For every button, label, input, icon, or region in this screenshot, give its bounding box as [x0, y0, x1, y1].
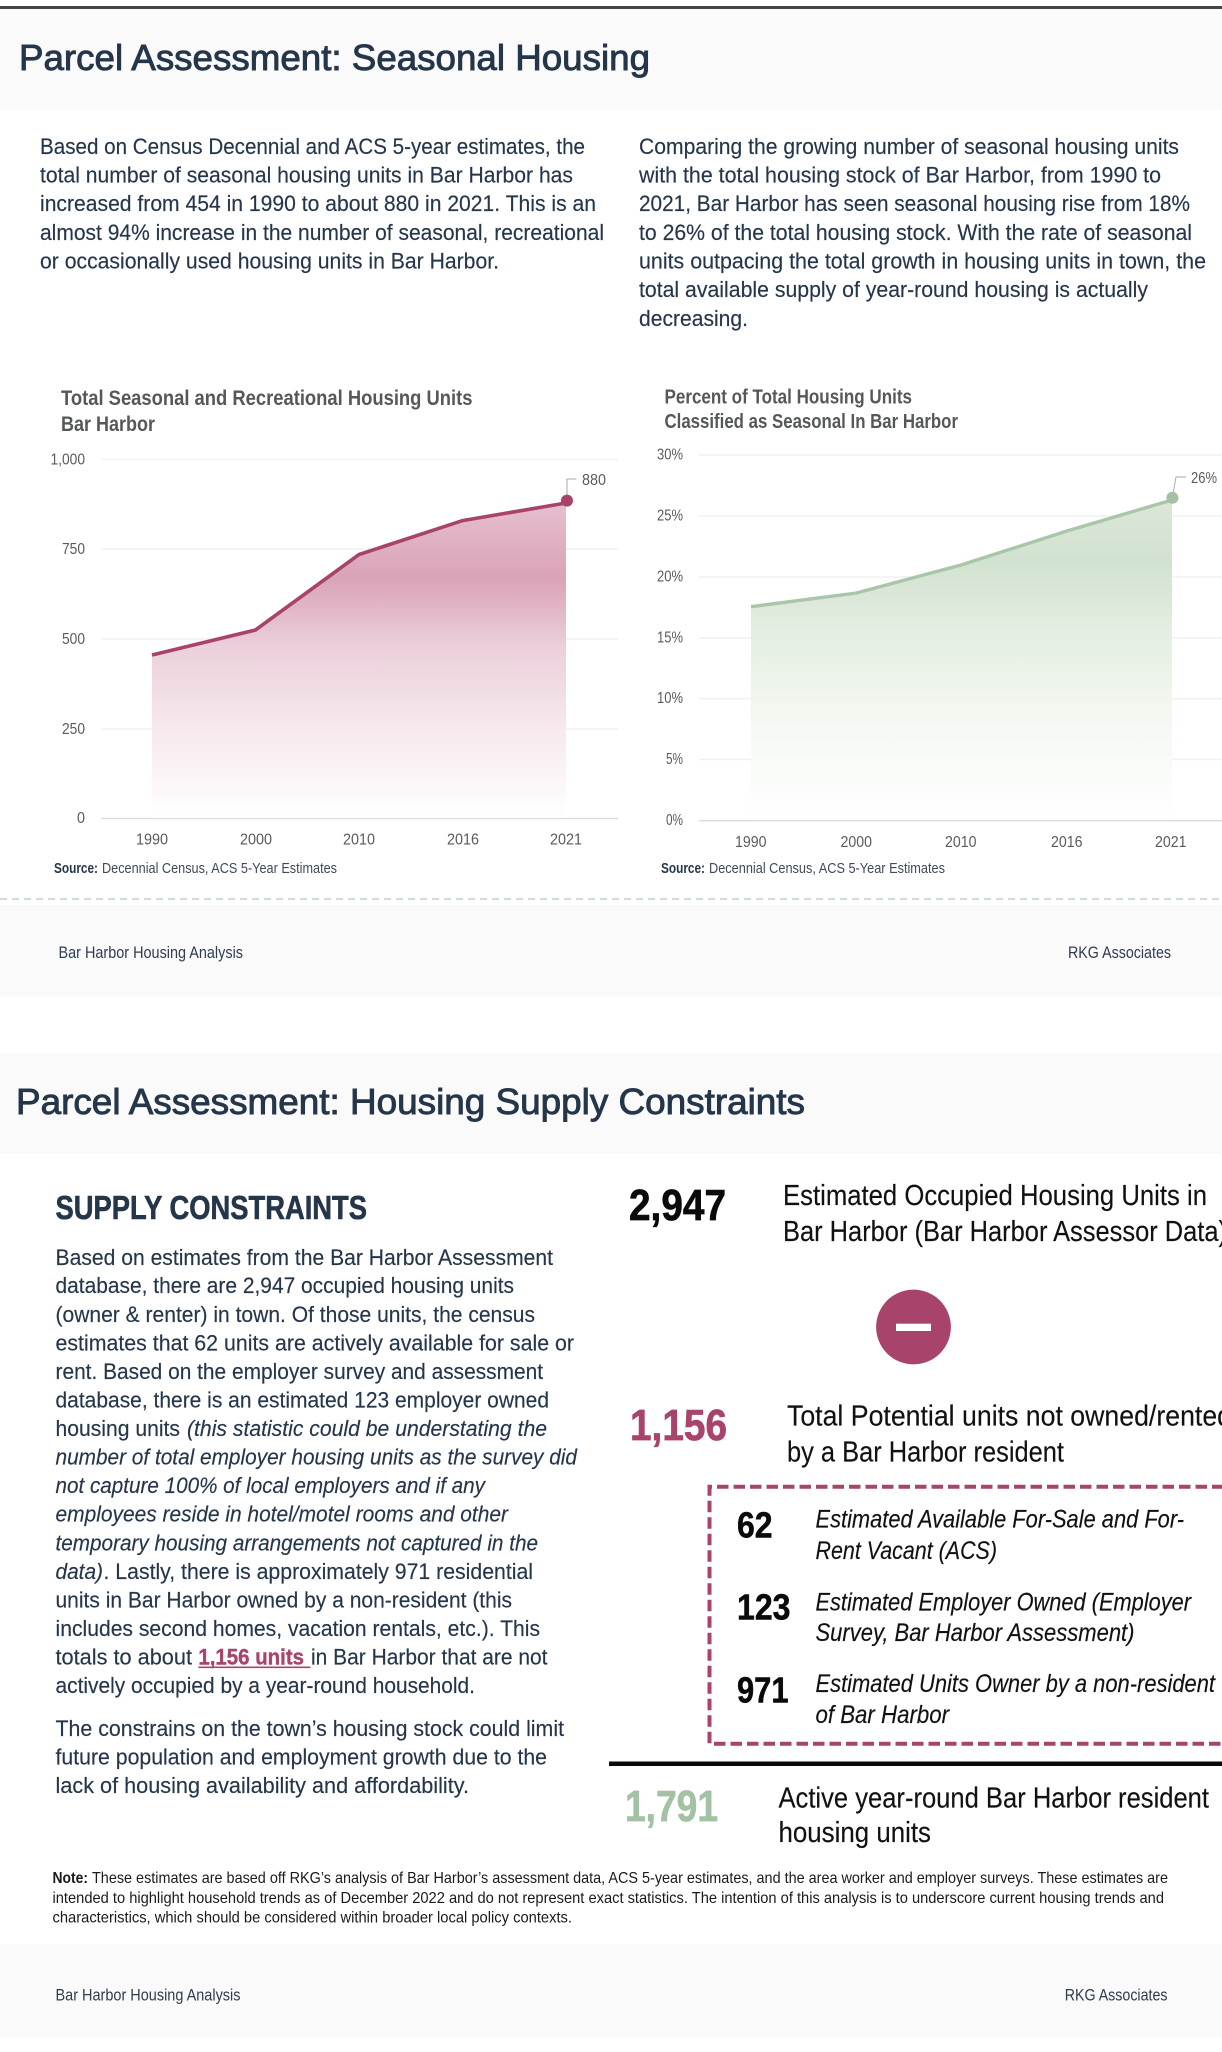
x axis labels: 2016: [447, 832, 479, 848]
paragraph 1: includes second homes, vacation rentals, etc.). This: [56, 1616, 540, 1641]
paragraph 1: rent. Based on the employer survey and assessment: [56, 1359, 543, 1384]
paragraph 1: database, there are 2,947 occupied housing units: [56, 1273, 514, 1298]
item: employer owned: Survey, Bar Harbor Assessment): [816, 1619, 1134, 1647]
y axis labels: 30%: [657, 446, 683, 464]
source note: Decennial Census, ACS 5-Year Estimates: [709, 861, 945, 877]
paragraph 1: estimates that 62 units are actively available for sale or: [56, 1330, 574, 1356]
footer: first section: Bar Harbor Housing Analysis: [58, 944, 243, 962]
stat: potential units not owned: 1,156: [630, 1401, 727, 1450]
y axis labels: 15%: [657, 630, 683, 646]
paragraph 1: database, there is an estimated 123 employer owned: [56, 1388, 549, 1412]
heading: SUPPLY CONSTRAINTS: [56, 1189, 367, 1226]
panel: supply constraints narrative: [56, 1189, 578, 1798]
x axis labels: 2021: [550, 832, 582, 848]
x axis labels: 2000: [840, 834, 872, 851]
area fill: [751, 500, 1172, 820]
top rule: [0, 6, 1222, 9]
footer: first section: [0, 905, 1222, 996]
icon: minus: [876, 1290, 951, 1364]
paragraph 1: (this statistic could be understating the: [187, 1416, 547, 1441]
total rule: [609, 1762, 1222, 1766]
footer: second section: [0, 1944, 1222, 2037]
y axis labels: 0%: [666, 812, 683, 829]
x axis labels: 2021: [1155, 834, 1187, 851]
y axis labels: 250: [62, 721, 85, 738]
text block: seasonal units left: increased from 454 in 1990 to about 880 in 2021. This is an: [40, 191, 596, 216]
paragraph 1: temporary housing arrangements not captured in the: [56, 1530, 538, 1556]
footer: second section: Bar Harbor Housing Analysis: [56, 1987, 240, 2005]
chart title: Percent of Total Housing Units: [664, 386, 912, 408]
stat: active year-round units: [625, 1782, 1209, 1849]
source note: Source:: [661, 861, 705, 877]
y axis labels: 25%: [657, 508, 683, 524]
x axis labels: 1990: [136, 832, 168, 848]
paragraph 1: housing units: [56, 1416, 180, 1441]
chart title: Classified as Seasonal In Bar Harbor: [664, 410, 958, 433]
title: seasonal housing: Parcel Assessment: Seasonal Housing: [19, 37, 650, 78]
text block: seasonal units left: Based on Census Decennial and ACS 5-year estimates, the: [40, 134, 585, 159]
chart title: [61, 386, 473, 436]
stat: potential units not owned: by a Bar Harbor resident: [787, 1436, 1064, 1468]
item: employer owned: [737, 1587, 1192, 1647]
header: housing supply constraints: [0, 1053, 1222, 1154]
paragraph 1: number of total employer housing units as the survey did: [56, 1444, 578, 1470]
item: non-resident owned: [737, 1670, 1216, 1729]
footer: first section: RKG Associates: [1068, 944, 1171, 962]
chart title: [664, 386, 958, 433]
text block: seasonal units right: units outpacing the total growth in housing units in town, the: [639, 248, 1206, 274]
text block: seasonal units right: Comparing the growing number of seasonal housing units: [639, 134, 1179, 159]
source note: Source:: [54, 861, 98, 877]
y axis labels: 20%: [657, 568, 683, 586]
item: available vacant: 62: [737, 1504, 773, 1546]
footer: second section: RKG Associates: [1065, 1987, 1168, 2005]
paragraph 1: units in Bar Harbor owned by a non-resident (this: [56, 1588, 512, 1612]
stat: potential units not owned: [630, 1401, 1222, 1468]
text block: seasonal units left: total number of seasonal housing units in Bar Harbor has: [40, 162, 573, 188]
paragraph 1: employees reside in hotel/motel rooms and other: [56, 1502, 510, 1526]
paragraph 1: (owner & renter) in town. Of those units, the census: [56, 1302, 535, 1327]
y axis labels: 10%: [657, 690, 683, 707]
data point callout 880: 880: [582, 472, 606, 489]
data point callout 26%: [1166, 470, 1217, 504]
paragraph 1: in Bar Harbor that are not: [311, 1644, 548, 1670]
x axis labels: [136, 832, 582, 848]
area fill: [152, 503, 566, 818]
chart title: Bar Harbor: [61, 412, 156, 436]
stat: active year-round units: housing units: [778, 1817, 931, 1849]
y axis labels: 750: [62, 541, 85, 558]
text block: seasonal units right: [638, 134, 1206, 331]
text block: seasonal units right: with the total housing stock of Bar Harbor, from 1990 to: [638, 162, 1161, 188]
title: housing supply constraints: Parcel Assessment: Housing Supply Constraints: [16, 1081, 805, 1122]
text block: seasonal units right: total available supply of year-round housing is actually: [639, 277, 1148, 302]
chart title: Total Seasonal and Recreational Housing Units: [61, 386, 473, 410]
item: available vacant: Rent Vacant (ACS): [816, 1537, 997, 1565]
x axis labels: 2016: [1051, 834, 1083, 851]
line series: [152, 503, 566, 655]
item: employer owned: 123: [737, 1587, 790, 1628]
text block: seasonal units left: or occasionally used housing units in Bar Harbor.: [40, 248, 499, 274]
y axis labels: 5%: [666, 751, 683, 768]
text block: seasonal units left: [40, 134, 604, 274]
paragraph 2: The constrains on the town’s housing stock could limit: [56, 1716, 564, 1741]
x axis labels: 2010: [343, 832, 375, 848]
paragraph 1: totals to about: [56, 1644, 192, 1670]
chart: total seasonal and recreational housing units: [50, 386, 618, 877]
x axis labels: 2000: [240, 832, 272, 848]
y axis labels: 500: [62, 631, 85, 648]
data point callout 880: [561, 472, 606, 507]
paragraph 2: future population and employment growth due to the: [56, 1744, 547, 1770]
paragraph 1: data): [56, 1559, 103, 1584]
paragraph 1: Based on estimates from the Bar Harbor Assessment: [56, 1245, 553, 1270]
note: Note:: [52, 1870, 88, 1887]
paragraph 1: . Lastly, there is approximately 971 residential: [104, 1559, 533, 1584]
paragraph 1: 1,156 units: [198, 1644, 304, 1670]
paragraph 1: not capture 100% of local employers and if any: [56, 1473, 487, 1498]
text block: seasonal units right: decreasing.: [639, 306, 748, 331]
dashed breakdown box: [710, 1487, 1222, 1744]
item: non-resident owned: of Bar Harbor: [816, 1701, 950, 1729]
item: available vacant: [737, 1504, 1184, 1565]
stat: occupied units: 2,947: [629, 1181, 726, 1230]
stat: active year-round units: 1,791: [625, 1782, 718, 1831]
x axis labels: 1990: [735, 834, 767, 851]
y axis labels: [50, 452, 85, 827]
text block: seasonal units left: almost 94% increase in the number of seasonal, recreational: [40, 220, 604, 245]
x axis labels: [735, 834, 1187, 851]
item: non-resident owned: 971: [737, 1670, 788, 1710]
source note: Decennial Census, ACS 5-Year Estimates: [102, 861, 337, 877]
paragraph 1: actively occupied by a year-round household.: [56, 1673, 475, 1698]
line series: [751, 500, 1172, 607]
header: seasonal housing: [0, 9, 1222, 110]
note: characteristics, which should be considered within broader local policy contexts.: [52, 1910, 572, 1926]
y axis labels: 1,000: [50, 452, 85, 468]
paragraph 1: [56, 1245, 578, 1698]
y axis labels: [657, 446, 683, 829]
x axis labels: 2010: [945, 834, 977, 851]
paragraph 2: [56, 1716, 564, 1798]
text block: seasonal units right: 2021, Bar Harbor has seen seasonal housing rise from 18%: [639, 191, 1190, 216]
paragraph 2: lack of housing availability and affordability.: [56, 1773, 469, 1798]
panel: housing unit calculation: [609, 1180, 1222, 1849]
note: [52, 1870, 1168, 1926]
stat: occupied units: [629, 1180, 1222, 1248]
chart: percent of housing units classified as seasonal: [657, 386, 1222, 877]
y axis labels: 0: [77, 810, 85, 827]
text block: seasonal units right: to 26% of the total housing stock. With the rate of seasonal: [639, 220, 1192, 245]
